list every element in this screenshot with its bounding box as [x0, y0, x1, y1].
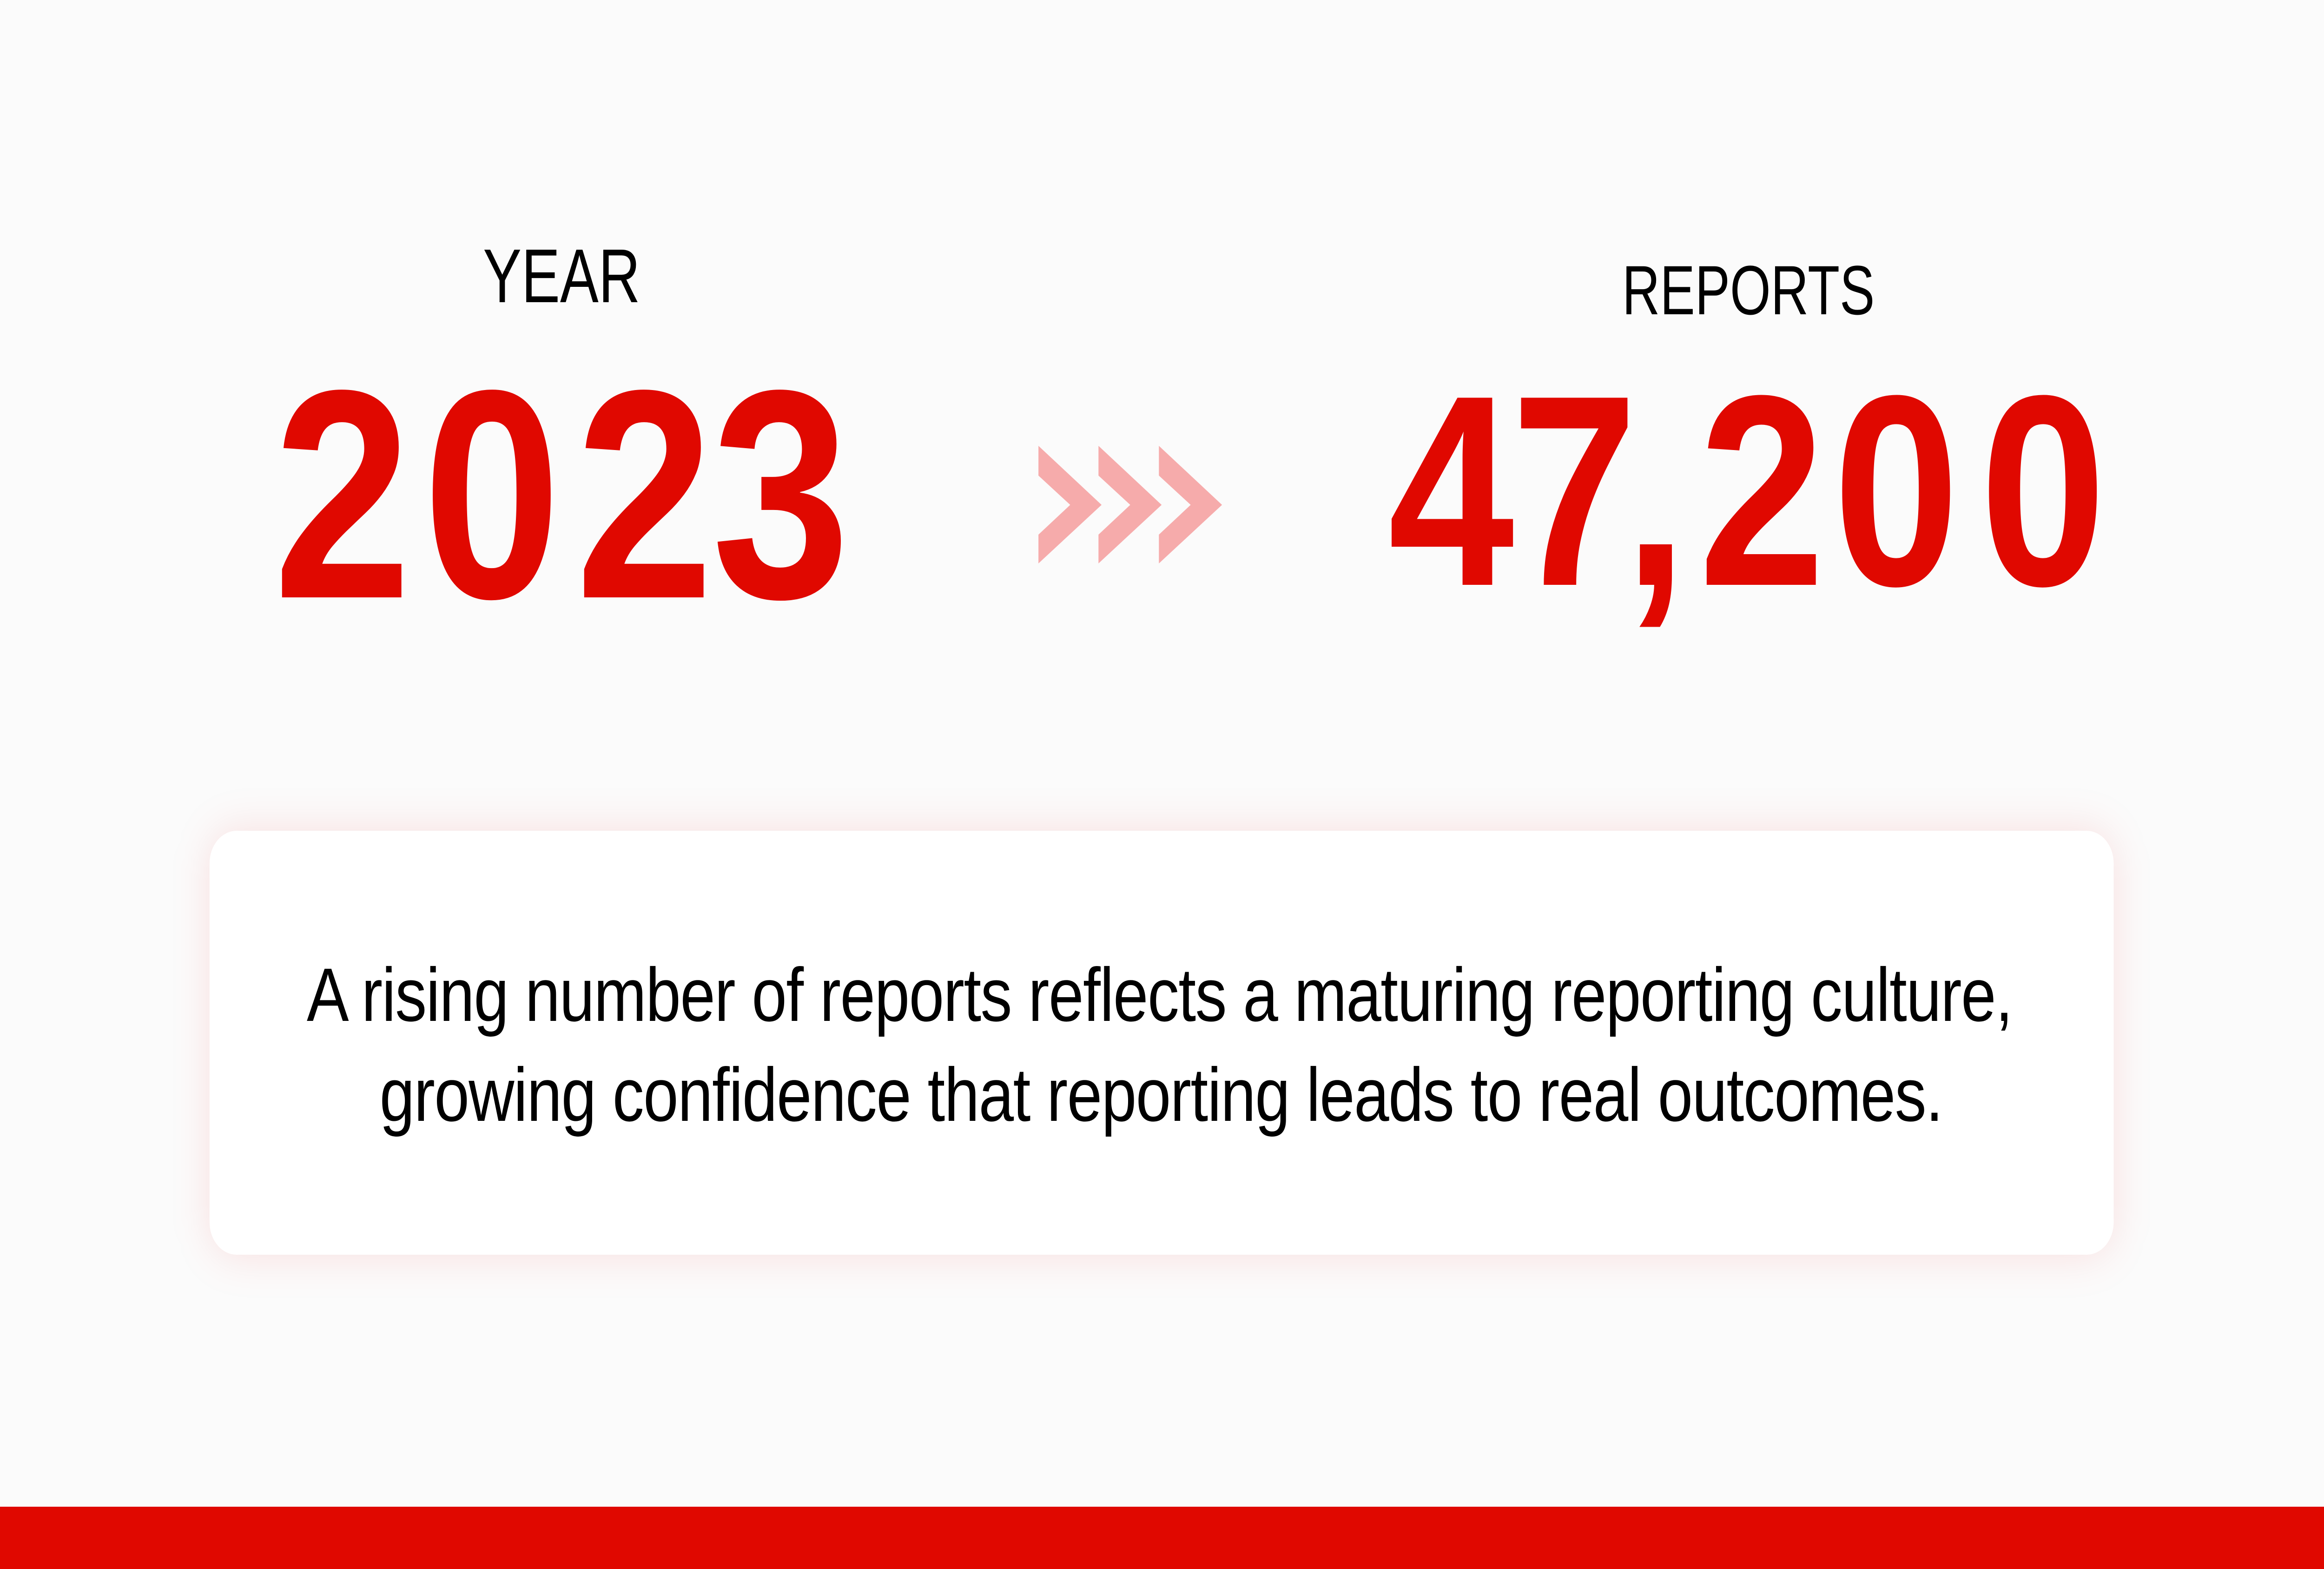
panel: message card	[210, 831, 2113, 1255]
icon: triple chevron arrow	[1038, 446, 1222, 563]
text block: card message: A rising number of reports reflects a maturing reporting culture,	[307, 952, 2013, 1037]
stat: 2023: 2023	[273, 328, 850, 661]
footer bar	[0, 1507, 2324, 1569]
label: year: YEAR	[483, 233, 640, 318]
label: reports: REPORTS	[1622, 252, 1875, 330]
stat: 47,200: 47,200	[1388, 339, 2106, 643]
text block: card message: growing confidence that reporting leads to real outcomes.	[380, 1052, 1943, 1137]
text block: card message	[307, 952, 2013, 1137]
